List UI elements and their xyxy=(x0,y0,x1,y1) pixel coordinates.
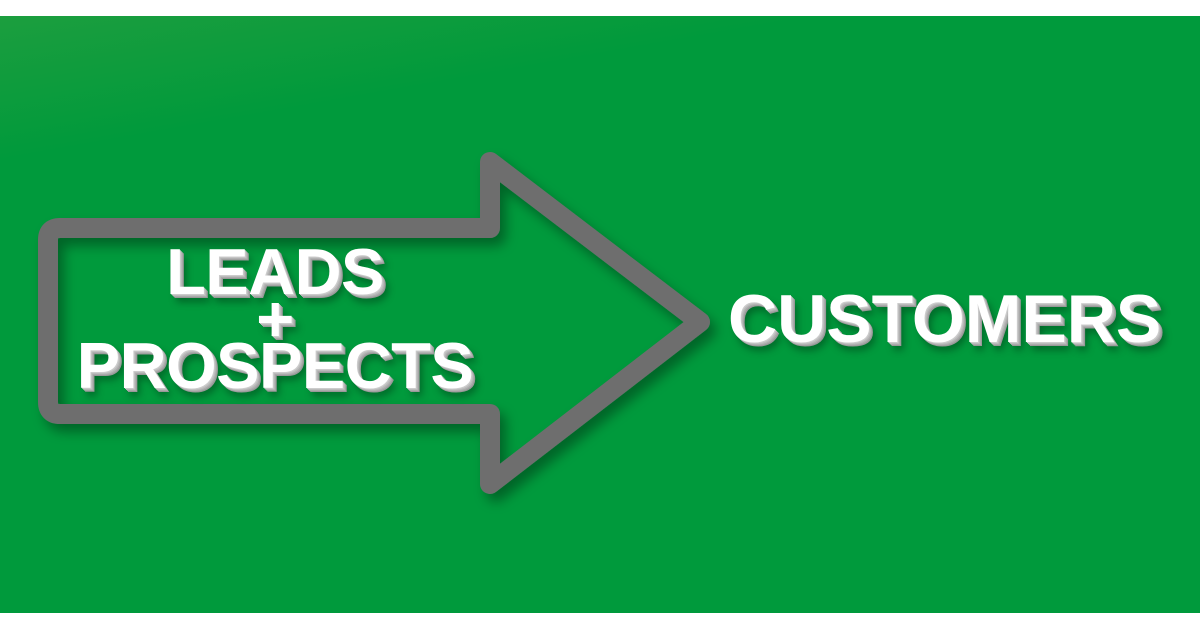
text: customers: CUSTOMERS xyxy=(728,281,1161,357)
text: leads + prospects: LEADS xyxy=(166,235,384,308)
text: leads + prospects: + xyxy=(256,282,294,355)
text: leads + prospects: PROSPECTS xyxy=(77,329,473,402)
text: leads + prospects xyxy=(77,235,480,402)
